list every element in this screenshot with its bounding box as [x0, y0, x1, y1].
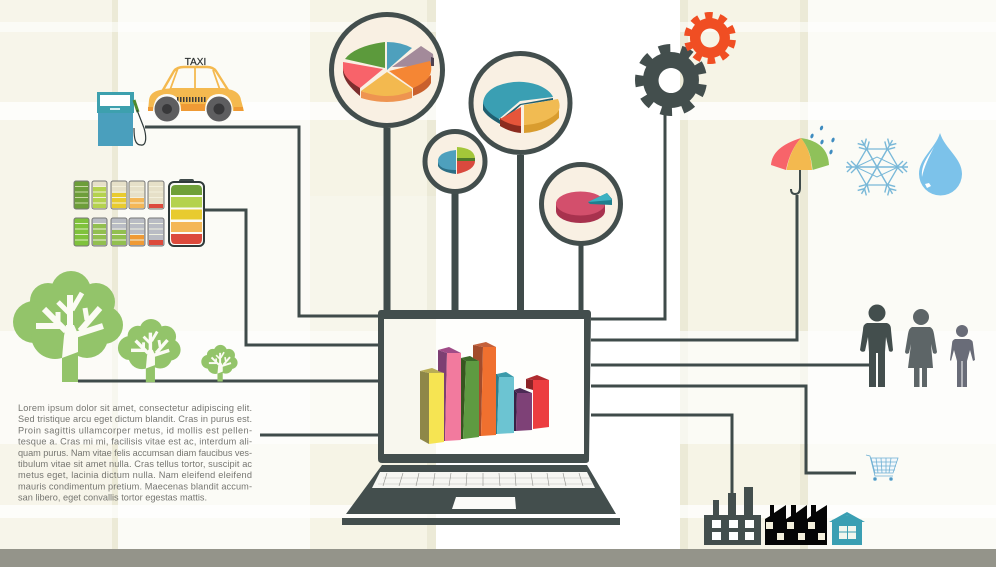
battery row two: [74, 218, 164, 246]
text block: lorem ipsum: mauris condimentum pretium. Maecenas blandit accum-: [18, 482, 252, 492]
touchpad: [452, 497, 516, 509]
text block: lorem ipsum: san libero, eget convallis tortor egestas mattis.: [18, 492, 207, 502]
taxi label: TAXI: [185, 57, 206, 68]
pie circle: single-wedge pie: [542, 164, 620, 244]
orange bar: [473, 342, 496, 436]
icon: small batteries: [74, 181, 164, 246]
green bar: [461, 356, 479, 439]
pie circle: large six-slice pie: [332, 14, 442, 126]
pink bar: [438, 347, 461, 441]
icon: water drop: [919, 133, 962, 196]
icon: red gear: [686, 14, 734, 62]
bar chart: [420, 342, 549, 444]
footer bar: [0, 549, 996, 567]
laptop base: [346, 465, 616, 514]
icon: man: [860, 304, 893, 387]
purple bar: [514, 388, 532, 431]
icon: grey factory: [704, 487, 761, 545]
text block: lorem ipsum: Proin sagittis ullamcorper metus, id mollis est pellen-: [18, 426, 252, 436]
icon: dark gear: [636, 45, 706, 115]
icon: woman: [905, 309, 937, 387]
text block: lorem ipsum: tibulum vitae sit amet nulla. Cras tellus tortor, suscipit ac: [18, 459, 252, 469]
text block: lorem ipsum: Lorem ipsum dolor sit amet, consectetur adipiscing elit.: [18, 403, 252, 413]
icon: child: [950, 325, 975, 387]
text block: lorem ipsum: [18, 403, 252, 502]
icon: snowflake: [846, 137, 908, 197]
icon: black factory: [765, 505, 827, 545]
laptop front edge: [342, 518, 620, 525]
text block: lorem ipsum: quam purus. Nam vitae felis accumsan diam faucibus ves-: [18, 448, 252, 458]
icon: small tree: [201, 345, 238, 382]
icon: shopping cart: [866, 455, 898, 480]
icon: large tree: [13, 271, 123, 382]
red bar: [526, 375, 549, 429]
icon: taxi: [148, 57, 244, 122]
pie circle: small three-slice pie: [425, 132, 485, 192]
laptop screen: [378, 310, 591, 463]
connector lines: [78, 113, 870, 495]
pie circle: three-slice pie: [471, 54, 570, 152]
text block: lorem ipsum: metus eget, lacinia dictum nulla. Nam eleifend eleifend: [18, 470, 252, 480]
icon: medium tree: [118, 319, 181, 382]
text block: lorem ipsum: tesque a. Cras mi mi, facilisis vitae est ac, interdum ali-: [18, 436, 252, 446]
icon: large battery: [169, 179, 204, 246]
cyan bar: [496, 372, 514, 434]
keyboard: [372, 472, 595, 488]
text block: lorem ipsum: Sed tristique arcu eget dictum blandit. Cras in purus est.: [18, 414, 252, 424]
icon: house: [829, 512, 865, 545]
yellow bar: [420, 368, 444, 444]
icon: fuel pump: [97, 92, 146, 146]
icon: umbrella with rain: [771, 125, 835, 194]
battery row one: [74, 181, 164, 209]
laptop: [342, 310, 620, 525]
